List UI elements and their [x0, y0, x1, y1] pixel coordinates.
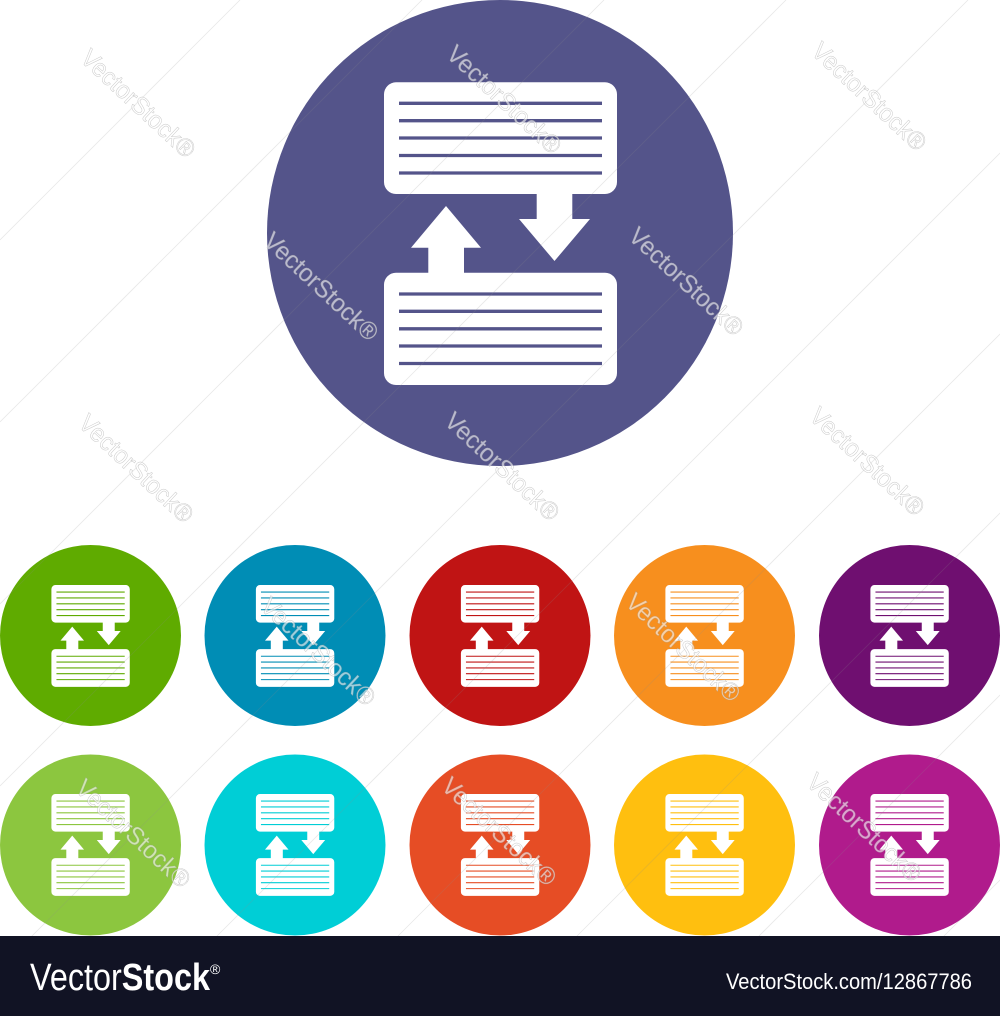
watermarks: VectorStock®: [806, 37, 932, 157]
icon: green: [0, 545, 181, 726]
icon: cyan: [204, 754, 386, 936]
watermarks: VectorStock®: [439, 407, 565, 527]
watermarks: [70, 37, 932, 894]
icon: magenta: [819, 754, 1000, 936]
icon: yellow: [614, 754, 795, 936]
watermarks: VectorStock®: [623, 222, 749, 342]
large icon: navy circle with two text boxes and exchange arrows: [267, 0, 733, 466]
icon: orange red: [410, 754, 590, 936]
registered mark: ®: [210, 961, 221, 977]
icon: blue: [204, 545, 386, 726]
icon: orange: [614, 545, 795, 726]
watermarks: VectorStock®: [441, 40, 567, 160]
icon: light green: [0, 754, 181, 936]
watermarks: VectorStock®: [70, 774, 196, 894]
footer bar: [0, 936, 1000, 1016]
watermarks: VectorStock®: [801, 768, 927, 888]
watermarks: VectorStock®: [620, 588, 746, 708]
icon: purple: [819, 545, 1000, 726]
watermarks: VectorStock®: [73, 409, 199, 529]
watermarks: VectorStock®: [258, 227, 384, 347]
footer image id: VectorStock.com/12867786: [726, 969, 972, 994]
watermarks: VectorStock®: [436, 772, 562, 892]
watermarks: VectorStock®: [804, 402, 930, 522]
watermarks: VectorStock®: [75, 44, 201, 164]
footer logo: VectorStock: [30, 957, 211, 999]
watermarks: VectorStock®: [255, 592, 381, 712]
icon: red: [410, 545, 590, 726]
